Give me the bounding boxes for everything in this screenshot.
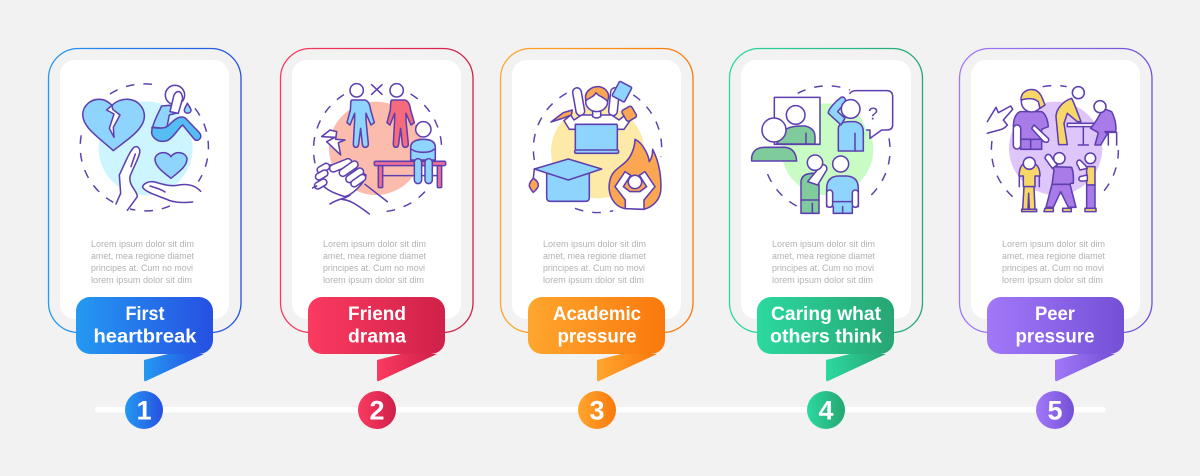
icon: overloaded student, graduation cap and flame (529, 81, 662, 213)
panel: friend drama: Lorem ipsum dolor sit dim (323, 239, 426, 250)
panel: caring what others think (730, 48, 922, 429)
panel: friend drama (280, 48, 473, 429)
panel: first heartbreak: amet, mea regione diamet (91, 251, 194, 262)
icon: mirror, worried person and gossiping friends (752, 86, 893, 213)
panel: peer pressure (960, 48, 1152, 429)
panel: academic pressure (500, 48, 693, 429)
panel: first heartbreak: Lorem ipsum dolor sit dim (91, 239, 194, 250)
panel: first heartbreak: lorem ipsum dolor sit dim (91, 275, 192, 286)
title badge: academic pressure: pressure (558, 326, 637, 348)
panel: academic pressure: lorem ipsum dolor sit dim (543, 275, 644, 286)
title badge: friend drama: drama (348, 326, 406, 348)
number 4: 4 (818, 396, 834, 426)
panel: academic pressure: amet, mea regione diamet (543, 251, 646, 262)
timeline line (95, 407, 1106, 412)
title badge: first heartbreak: First (126, 303, 165, 325)
title badge: caring what others think: others think (770, 326, 882, 348)
panel: peer pressure: amet, mea regione diamet (1002, 251, 1105, 262)
panel: friend drama: principes at. Cum no movi (323, 263, 425, 274)
icon: broken heart and caring hands (80, 84, 208, 211)
number 5 (1036, 391, 1074, 429)
title badge: first heartbreak (76, 297, 213, 381)
title badge: caring what others think: Caring what (771, 303, 881, 325)
icon: arguing friends and handshake (313, 84, 446, 214)
number 2 (358, 391, 396, 429)
title badge: friend drama: Friend (348, 303, 406, 325)
icon: mirror, worried person and gossiping friends: ? (868, 103, 878, 123)
panel: caring what others think: amet, mea regione diamet (772, 251, 875, 262)
number 3: 3 (589, 396, 605, 426)
panel: academic pressure: principes at. Cum no movi (543, 263, 645, 274)
title badge: academic pressure: Academic (553, 303, 641, 325)
number 1: 1 (136, 396, 152, 426)
title badge: friend drama (308, 297, 445, 381)
number 1 (125, 391, 163, 429)
panel: first heartbreak: principes at. Cum no movi (91, 263, 193, 274)
title badge: caring what others think (757, 297, 894, 381)
panel: peer pressure: Lorem ipsum dolor sit dim (1002, 239, 1105, 250)
panel: academic pressure: Lorem ipsum dolor sit dim (543, 239, 646, 250)
title badge: peer pressure (987, 297, 1124, 381)
panel: peer pressure: lorem ipsum dolor sit dim (1002, 275, 1103, 286)
panel: peer pressure: principes at. Cum no movi (1002, 263, 1104, 274)
panel: caring what others think: principes at. Cum no movi (772, 263, 874, 274)
panel: friend drama: amet, mea regione diamet (323, 251, 426, 262)
number 4 (807, 391, 845, 429)
panel: friend drama: lorem ipsum dolor sit dim (323, 275, 424, 286)
panel: caring what others think: Lorem ipsum dolor sit dim (772, 239, 875, 250)
title badge: academic pressure (528, 297, 665, 381)
icon: teens pressured by peers (987, 86, 1118, 212)
number 2: 2 (369, 396, 385, 426)
title badge: peer pressure: Peer (1035, 303, 1075, 325)
title badge: peer pressure: pressure (1016, 326, 1095, 348)
panel: caring what others think: lorem ipsum dolor sit dim (772, 275, 873, 286)
number 5: 5 (1047, 396, 1063, 426)
title badge: first heartbreak: heartbreak (94, 326, 197, 348)
panel: first heartbreak (48, 48, 241, 429)
number 3 (578, 391, 616, 429)
